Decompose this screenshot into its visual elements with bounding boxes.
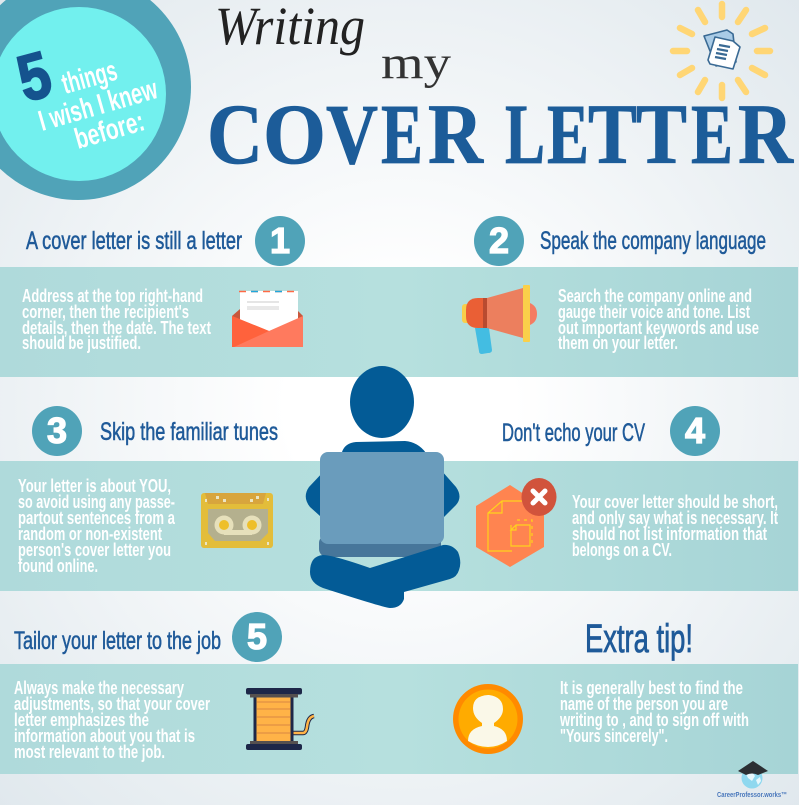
text: tip 4: belongs on a CV. bbox=[572, 540, 672, 560]
title: R bbox=[738, 86, 794, 182]
badge: 5 things I wish I knew before: 5 bbox=[10, 37, 59, 116]
icon: cassette bbox=[201, 493, 273, 548]
text: tip 5: adjustments, so that your cover bbox=[14, 694, 210, 714]
icon: megaphone bbox=[462, 285, 537, 354]
text: tip 5: information about you that is bbox=[14, 726, 195, 746]
logo: CareerProfessor.works bbox=[717, 761, 787, 799]
text: tip 3: partout sentences from a bbox=[18, 508, 176, 528]
badge: 5 things I wish I knew before: things bbox=[58, 55, 121, 101]
text: tip 2 bbox=[558, 286, 759, 353]
heading 1 bbox=[26, 216, 305, 266]
text: extra tip bbox=[559, 678, 749, 746]
text: tip 5 bbox=[14, 678, 210, 762]
text: tip 1: Address at the top right-hand bbox=[22, 286, 203, 306]
icon: envelope bbox=[232, 291, 303, 347]
text: tip 1: should be justified. bbox=[22, 333, 141, 353]
text: tip 3: person's cover letter you bbox=[18, 540, 171, 560]
text: tip 5: letter emphasizes the bbox=[14, 710, 149, 730]
icon: rejected document hexagon bbox=[476, 478, 556, 567]
heading 1: A cover letter is still a letter bbox=[26, 227, 242, 255]
heading 5 bbox=[14, 612, 282, 662]
heading 3: Skip the familiar tunes bbox=[100, 418, 278, 446]
text: extra tip: name of the person you are bbox=[560, 694, 728, 714]
text: extra tip: "Yours sincerely". bbox=[560, 726, 668, 746]
heading: extra tip: Extra tip! bbox=[585, 617, 693, 661]
text: tip 4 bbox=[572, 492, 778, 560]
heading 4: 4 bbox=[685, 410, 705, 451]
band: row 1 bbox=[0, 267, 798, 377]
heading 2 bbox=[474, 216, 766, 266]
band: row 3 bbox=[0, 664, 798, 774]
badge: 5 things I wish I knew before: I wish I knew bbox=[35, 73, 161, 138]
badge: 5 things I wish I knew before bbox=[0, 0, 191, 200]
title: V bbox=[326, 86, 378, 182]
title: R bbox=[428, 86, 484, 182]
title: T bbox=[636, 86, 687, 182]
figure: person with laptop bbox=[306, 366, 460, 608]
title bbox=[207, 0, 794, 182]
title: my bbox=[381, 37, 452, 89]
text: tip 1 bbox=[22, 286, 211, 353]
icon: thread spool bbox=[246, 688, 314, 750]
heading 4: Don't echo your CV bbox=[502, 419, 645, 447]
badge: 5 things I wish I knew before: before: bbox=[71, 105, 148, 156]
icon: person avatar bbox=[453, 684, 523, 754]
text: tip 3: found online. bbox=[18, 556, 98, 576]
text: tip 5: Always make the necessary bbox=[14, 678, 184, 698]
text: tip 1: details, then the date. The text bbox=[22, 318, 211, 338]
title: E bbox=[381, 86, 423, 182]
title: C bbox=[207, 86, 263, 182]
text: tip 3 bbox=[18, 476, 176, 576]
heading 1: 1 bbox=[270, 220, 290, 261]
heading 3: 3 bbox=[47, 410, 67, 451]
heading 5: 5 bbox=[247, 616, 267, 657]
text: tip 3: so avoid using any passe- bbox=[18, 492, 175, 512]
band: row 2 bbox=[0, 461, 798, 591]
heading 3 bbox=[32, 406, 278, 456]
title: E bbox=[691, 86, 733, 182]
title: O bbox=[263, 86, 326, 182]
title: L bbox=[505, 86, 545, 182]
heading 4 bbox=[502, 406, 720, 456]
text: tip 2: them on your letter. bbox=[558, 333, 678, 353]
text: tip 5: most relevant to the job. bbox=[14, 742, 165, 762]
title: E bbox=[547, 86, 589, 182]
title: T bbox=[588, 86, 637, 182]
icon: documents with sun rays bbox=[673, 4, 770, 98]
heading 2: 2 bbox=[489, 220, 509, 261]
text: tip 3: random or non-existent bbox=[18, 524, 162, 544]
text: tip 1: corner, then the recipient's bbox=[22, 302, 189, 322]
heading 5: Tailor your letter to the job bbox=[14, 627, 221, 655]
text: tip 3: Your letter is about YOU, bbox=[18, 476, 171, 496]
